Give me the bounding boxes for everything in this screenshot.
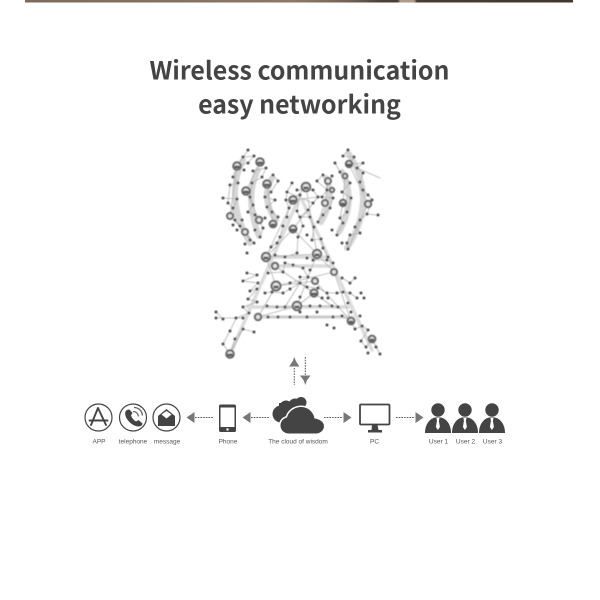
icon: network tower with signal waves xyxy=(216,150,380,358)
arrow: up xyxy=(289,357,300,385)
title xyxy=(150,52,449,122)
tower small dots xyxy=(216,150,380,354)
arrow: cloud to phone xyxy=(242,412,270,423)
arrow: down xyxy=(300,357,310,385)
title: Wireless communication xyxy=(150,52,449,88)
icon labels: User 1 xyxy=(429,438,448,446)
icon labels: The cloud of wisdom xyxy=(268,438,328,446)
gap and lower cloud xyxy=(280,407,324,434)
icon: cloud of wisdom xyxy=(272,397,324,434)
icon: user 3 xyxy=(479,403,505,433)
icon: APP xyxy=(85,404,112,431)
icon: user 1 xyxy=(425,403,451,433)
icon labels: User 2 xyxy=(456,438,475,446)
icon: user 2 xyxy=(452,403,478,433)
icon labels: telephone xyxy=(119,438,148,446)
tower large nodes xyxy=(226,158,375,358)
icon: phone xyxy=(219,404,236,432)
icon labels: message xyxy=(154,438,181,446)
arrow: message to phone xyxy=(186,412,213,423)
tower mesh bands xyxy=(216,150,380,354)
title: easy networking xyxy=(198,86,401,122)
top image strip xyxy=(25,0,573,2)
icon: telephone xyxy=(120,404,146,431)
tower node centres xyxy=(228,163,374,355)
upper cloud xyxy=(272,397,306,422)
icon labels: Phone xyxy=(219,438,238,446)
icon labels xyxy=(92,438,502,446)
icon: message xyxy=(153,404,180,431)
icon labels: User 3 xyxy=(483,438,502,446)
arrow: cloud to PC xyxy=(324,412,352,423)
icon: PC monitor xyxy=(360,404,390,432)
icon labels: APP xyxy=(92,438,106,446)
arrow: PC to users xyxy=(396,412,424,423)
icon labels: PC xyxy=(370,438,379,446)
